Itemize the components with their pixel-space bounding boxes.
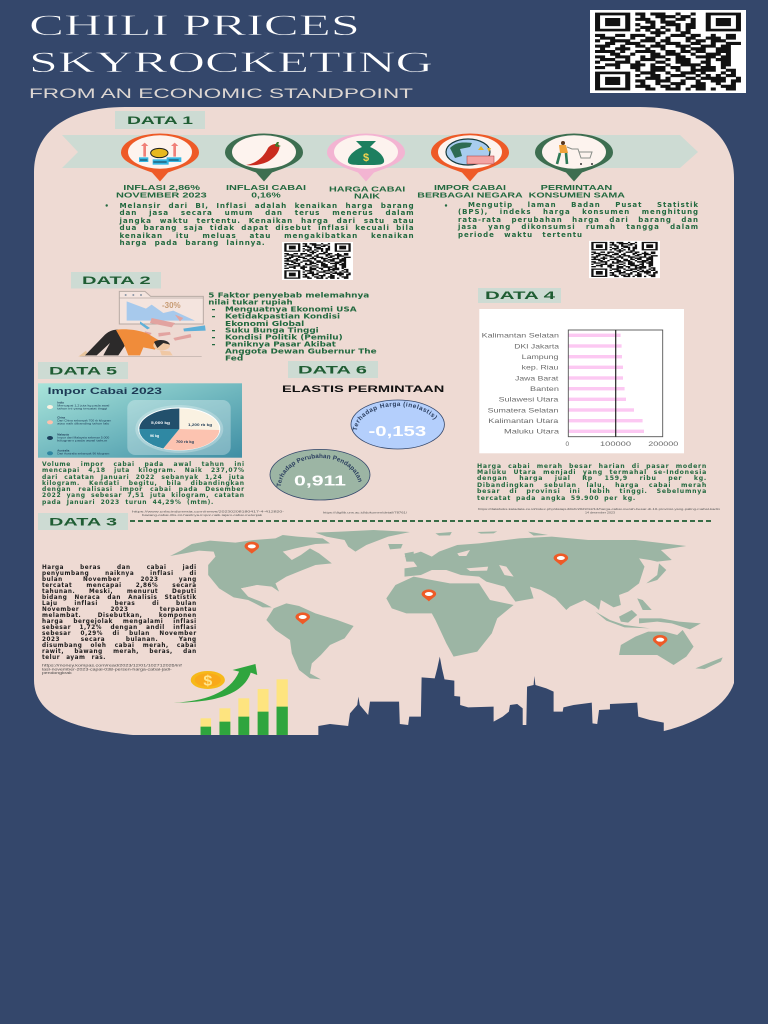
text block: rice and chili inflation: sebesar 1,72% dengan andil inflasi [42,625,197,631]
icon: money bag pin: $ [363,152,369,164]
heading: Data 5: DATA 5 [49,366,117,378]
city skyline [318,657,664,736]
infographic card: Impor Cabai 2023: Australia [57,448,70,452]
bar chart: chili price by province: Maluku Utara [504,429,560,436]
infographic card: Impor Cabai 2023: tahun ini yang tercatat tinggi [57,406,108,410]
text block: rice and chili inflation: 2023 secara bulanan. Yang [42,637,197,643]
source links: https://www.cnbcindonesia.com/news/20230208180417-4-412820- [132,510,284,514]
bar chart: chili price by province: kep. Riau [522,365,559,372]
pin labels: INFLASI 2,86% [123,183,201,192]
pin labels: NOVEMBER 2023 [116,190,207,199]
text: 5 factors: Fed [225,355,244,363]
icon: chili pin [225,134,303,182]
text block: consumer price index: (BPS), indeks harga konsumen menghitung [458,208,699,216]
source link: Data 3: https://money.kompas.com/read/2023/12/01/102712026/inf [42,664,183,668]
pin labels [116,183,625,201]
bar chart: chili price by province: 0 [566,441,570,448]
source links: 14 desember 2023 [585,510,615,514]
text block: rice and chili inflation: Laju inflasi beras di bulan [42,601,197,607]
text block: chili import volume [42,461,245,506]
world map with location pins [170,530,723,679]
panel: main content background [34,107,734,735]
heading: Data 1: DATA 1 [127,115,193,127]
pin labels: 0,16% [251,190,282,199]
text: 5 factors: Menguatnya Ekonomi USA [225,306,358,314]
heading: Data 2 [71,272,161,288]
QR code: header [590,10,746,93]
heading: Data 1 [115,111,205,129]
heading: Data 4: DATA 4 [485,290,557,302]
text block: chili import volume: Volume impor cabai pada awal tahun ini [42,461,245,468]
text: 5 factors: Ketidakpastian Kondisi [225,313,340,321]
bar chart: chili price by province: Sumatera Selatan [488,407,559,414]
infographic card: Impor Cabai 2023: 96 kg [150,434,159,438]
text: 5 factors: Paniknya Pasar Akibat [225,341,336,349]
text block: rice and chili inflation: bidang Neraca dan Analisis Statistik [42,595,197,601]
chart icon: rising bars, arrow and coin [174,664,288,735]
infographic card: Impor Cabai 2023: Malaysia [57,432,69,436]
text block: highest chili price: dengan harga jual Rp 159,9 ribu per kg. [477,475,707,482]
text: 5 factors: Kondisi Politik (Pemilu) [225,334,343,342]
text block: rice and chili inflation: November 2023 terpantau [42,607,197,613]
bar chart: chili price by province: Kalimantan Utara [488,418,559,425]
text block: rice and chili inflation: rawit, bawang merah, beras, dan [42,649,197,655]
infographic card: Impor Cabai 2023: China [57,416,66,420]
source link: Data 3: lasi-november-2023-capai-038-persen-harga-cabai-jadi- [42,667,173,671]
text block: inflation definition [119,201,414,247]
icon: shopper pin [535,134,613,182]
text block: consumer price index: jasa yang dikonsumsi rumah tangga dalam [458,223,699,231]
text block: chili import volume: dari catatan Januari 2022 sebanyak 1,24 juta [42,474,245,481]
text block: rice and chili inflation: sebesar 0,29% di bulan November [42,631,197,637]
infographic card: Impor Cabai 2023: Impor dari Malaysia sebesar 5.000 [57,436,110,440]
pin labels: BERBAGAI NEGARA [417,190,523,199]
text block: highest chili price: Dibandingkan sebulan lalu, harga cabai merah [477,482,707,489]
text block: chili import volume: pada Januari 2023 turun 44,29% (mtm). [42,499,214,506]
illustration: falling rupiah and collapsed person [78,291,206,357]
text: 5 factors: Suku Bunga Tinggi [225,327,319,335]
text block: chili import volume: mencapai 4,18 juta kilogram. Naik 237,07% [42,467,245,474]
QR code: Data 1 left [282,242,353,280]
infographic card: Impor Cabai 2023: Impor Cabai 2023 [48,386,162,397]
text block: chili import volume: kilogram. Kendati begitu, bila dibandingkan [42,480,245,487]
text block: chili import volume: dengan realisasi impor cabai pada Desember [42,486,245,493]
pin labels: INFLASI CABAI [226,183,306,192]
text block: chili import volume: 2022 yang sebesar 7,51 juta kilogram, catatan [42,492,245,499]
text block: rice and chili inflation: melambat. Disebutkan, komponen [42,613,197,619]
bullets: Data 1 [106,204,447,207]
text block: rice and chili inflation [42,564,197,661]
source link: Data 3: pendongkrak [42,671,72,675]
illustration: falling rupiah and collapsed person: -30% [162,301,181,310]
text block: inflation definition: dan jasa secara umum dan terus menerus dalam [120,208,414,217]
heading: Data 3: DATA 3 [49,516,117,528]
badge: price elasticity: -0,153 [368,423,426,440]
badge: price elasticity: Terhadap Harga (inelastis) [352,402,438,430]
bar chart: chili price by province: 100000 [600,441,632,448]
text: 5 factors: nilai tukar rupiah [208,299,293,307]
pin labels: PERMINTAAN [541,183,612,192]
text block: consumer price index: Mengutip laman Badan Pusat Statistik [468,201,699,209]
text: 5 factors: Anggota Dewan Gubernur The [225,348,377,356]
icon: import pin [431,134,509,182]
text block: highest chili price: Harga cabai merah besar harian di pasar modern [477,462,707,470]
text: 5 factors: Ekonomi Global [225,320,304,328]
text block: rice and chili inflation: bulan November 2023 yang [42,577,197,583]
text block: consumer price index [458,201,699,239]
infographic card: Impor Cabai 2023: India [57,400,64,404]
bar chart: chili price by province: Jawa Barat [515,375,559,382]
source links: bawang-cabai-rilis-ini-hasilnya-impor-naik-tajam-cabai-melonjak [142,513,263,517]
text block: inflation definition: harga pada barang lainnya. [120,238,266,247]
text block: rice and chili inflation: penyumbang naiknya inflasi di [42,571,197,577]
badge: price elasticity [350,400,445,450]
text: 5 factors: 5 Faktor penyebab melemahnya [208,292,369,300]
infographic card: Impor Cabai 2023 [38,383,242,458]
source links: https://databoks.katadata.co.id/index.php/datapublish/2023/12/14/harga-cabai-merah-besar-di-10-provinsi-yang-paling-mahal-kadin [478,507,720,511]
heading: Data 5 [38,362,128,379]
bar chart: chili price by province: DKI Jakarta [514,343,560,350]
source links: https://digilib.uns.ac.id/dokumen/detail/78761/ [323,510,407,514]
infographic card: Impor Cabai 2023: 700 rb kg [176,440,194,444]
bar chart: chili price by province: Sulawesi Utara [499,397,559,404]
bar chart: chili price by province: Banten [530,386,560,393]
heading: elastis permintaan: ELASTIS PERMINTAAN [282,384,444,394]
text block: highest chili price: Maluku Utara menjadi yang termahal se-Indonesia [477,469,707,476]
pin labels: IMPOR CABAI [434,183,506,192]
text block: rice and chili inflation: tercatat mencapai 2,86% secara [42,583,197,589]
badge: income elasticity: Terhadap Perubahan Pendapatan [276,454,362,487]
infographic card: Impor Cabai 2023: Dari China sebanyak 700 rb kilogram [57,418,112,422]
text block: highest chili price [477,462,707,502]
text block: highest chili price: tercatat pada angka 59.900 per kg. [477,495,636,502]
infographic card: Impor Cabai 2023: 1,200 rb kg [188,423,212,427]
text block: rice and chili inflation: harga bergejolak mengalami inflasi [42,619,197,625]
title: CHILI PRICES [29,10,360,42]
icon: inflation pin [121,134,199,182]
QR code: Data 1 right [589,241,660,278]
title: SKYROCKETING [29,47,433,79]
badge: income elasticity [270,449,370,500]
infographic card: Impor Cabai 2023: Mencapai 1,2 juta kg pada awal [57,404,110,408]
text block: rice and chili inflation: tahunan. Meski, menurut Deputi [42,589,197,595]
source link: Data 3 [42,664,183,675]
infographic card: Impor Cabai 2023: Dari Australia sebanyak 96 kilogram [57,452,110,456]
text block: highest chili price: besar di provinsi ini lebih tinggi. Sebelumnya [477,488,707,495]
heading: Data 4 [478,288,561,303]
text block: consumer price index: rata-rata perubahan harga dari barang dan [458,216,699,224]
infographic card: Impor Cabai 2023: atau naik dibanding tahun lalu [57,422,110,426]
title [29,10,433,79]
text block: consumer price index: periode waktu tertentu [458,231,583,239]
text block: inflation definition: jangka waktu tertentu. Kenaikan harga dari satu atau [120,216,414,225]
text: 5 factors [208,292,377,363]
heading: Data 2: DATA 2 [82,275,151,287]
text block: inflation definition: Melansir dari BI, Inflasi adalah kenaikan harga barang [120,201,414,210]
text block: rice and chili inflation: Harga beras dan cabai jadi [42,565,197,571]
heading: Data 6 [288,361,378,378]
pin labels: NAIK [354,192,381,201]
source links [132,507,720,517]
text block: rice and chili inflation: disumbang oleh cabai merah, cabai [42,643,197,649]
icon: money bag pin [327,134,405,182]
pin labels: HARGA CABAI [329,184,405,193]
bar chart: chili price by province: 200000 [648,441,679,448]
bar chart: chili price by province: Lampung [522,354,559,361]
subtitle: FROM AN ECONOMIC STANDPOINT [29,86,413,101]
text block: inflation definition: kenaikan itu meluas atau mengakibatkan kenaikan [120,231,414,240]
text block: inflation definition: dua barang saja tidak dapat disebut inflasi kecuali bila [120,223,414,232]
pin labels: KONSUMEN SAMA [529,190,625,199]
bar chart: chili price by province [479,309,684,453]
chart icon: rising bars, arrow and coin: $ [203,673,213,689]
infographic card: Impor Cabai 2023: kilogram pada awal tahun [57,438,108,442]
badge: income elasticity: 0,911 [294,472,346,490]
heading: Data 6: DATA 6 [298,364,367,376]
text block: rice and chili inflation: telur ayam ras. [42,655,106,661]
infographic card: Impor Cabai 2023: 5,000 kg [151,421,170,425]
heading: Data 3 [38,513,128,530]
bar chart: chili price by province: Kalimantan Selatan [482,333,560,340]
arrow band [62,135,698,168]
